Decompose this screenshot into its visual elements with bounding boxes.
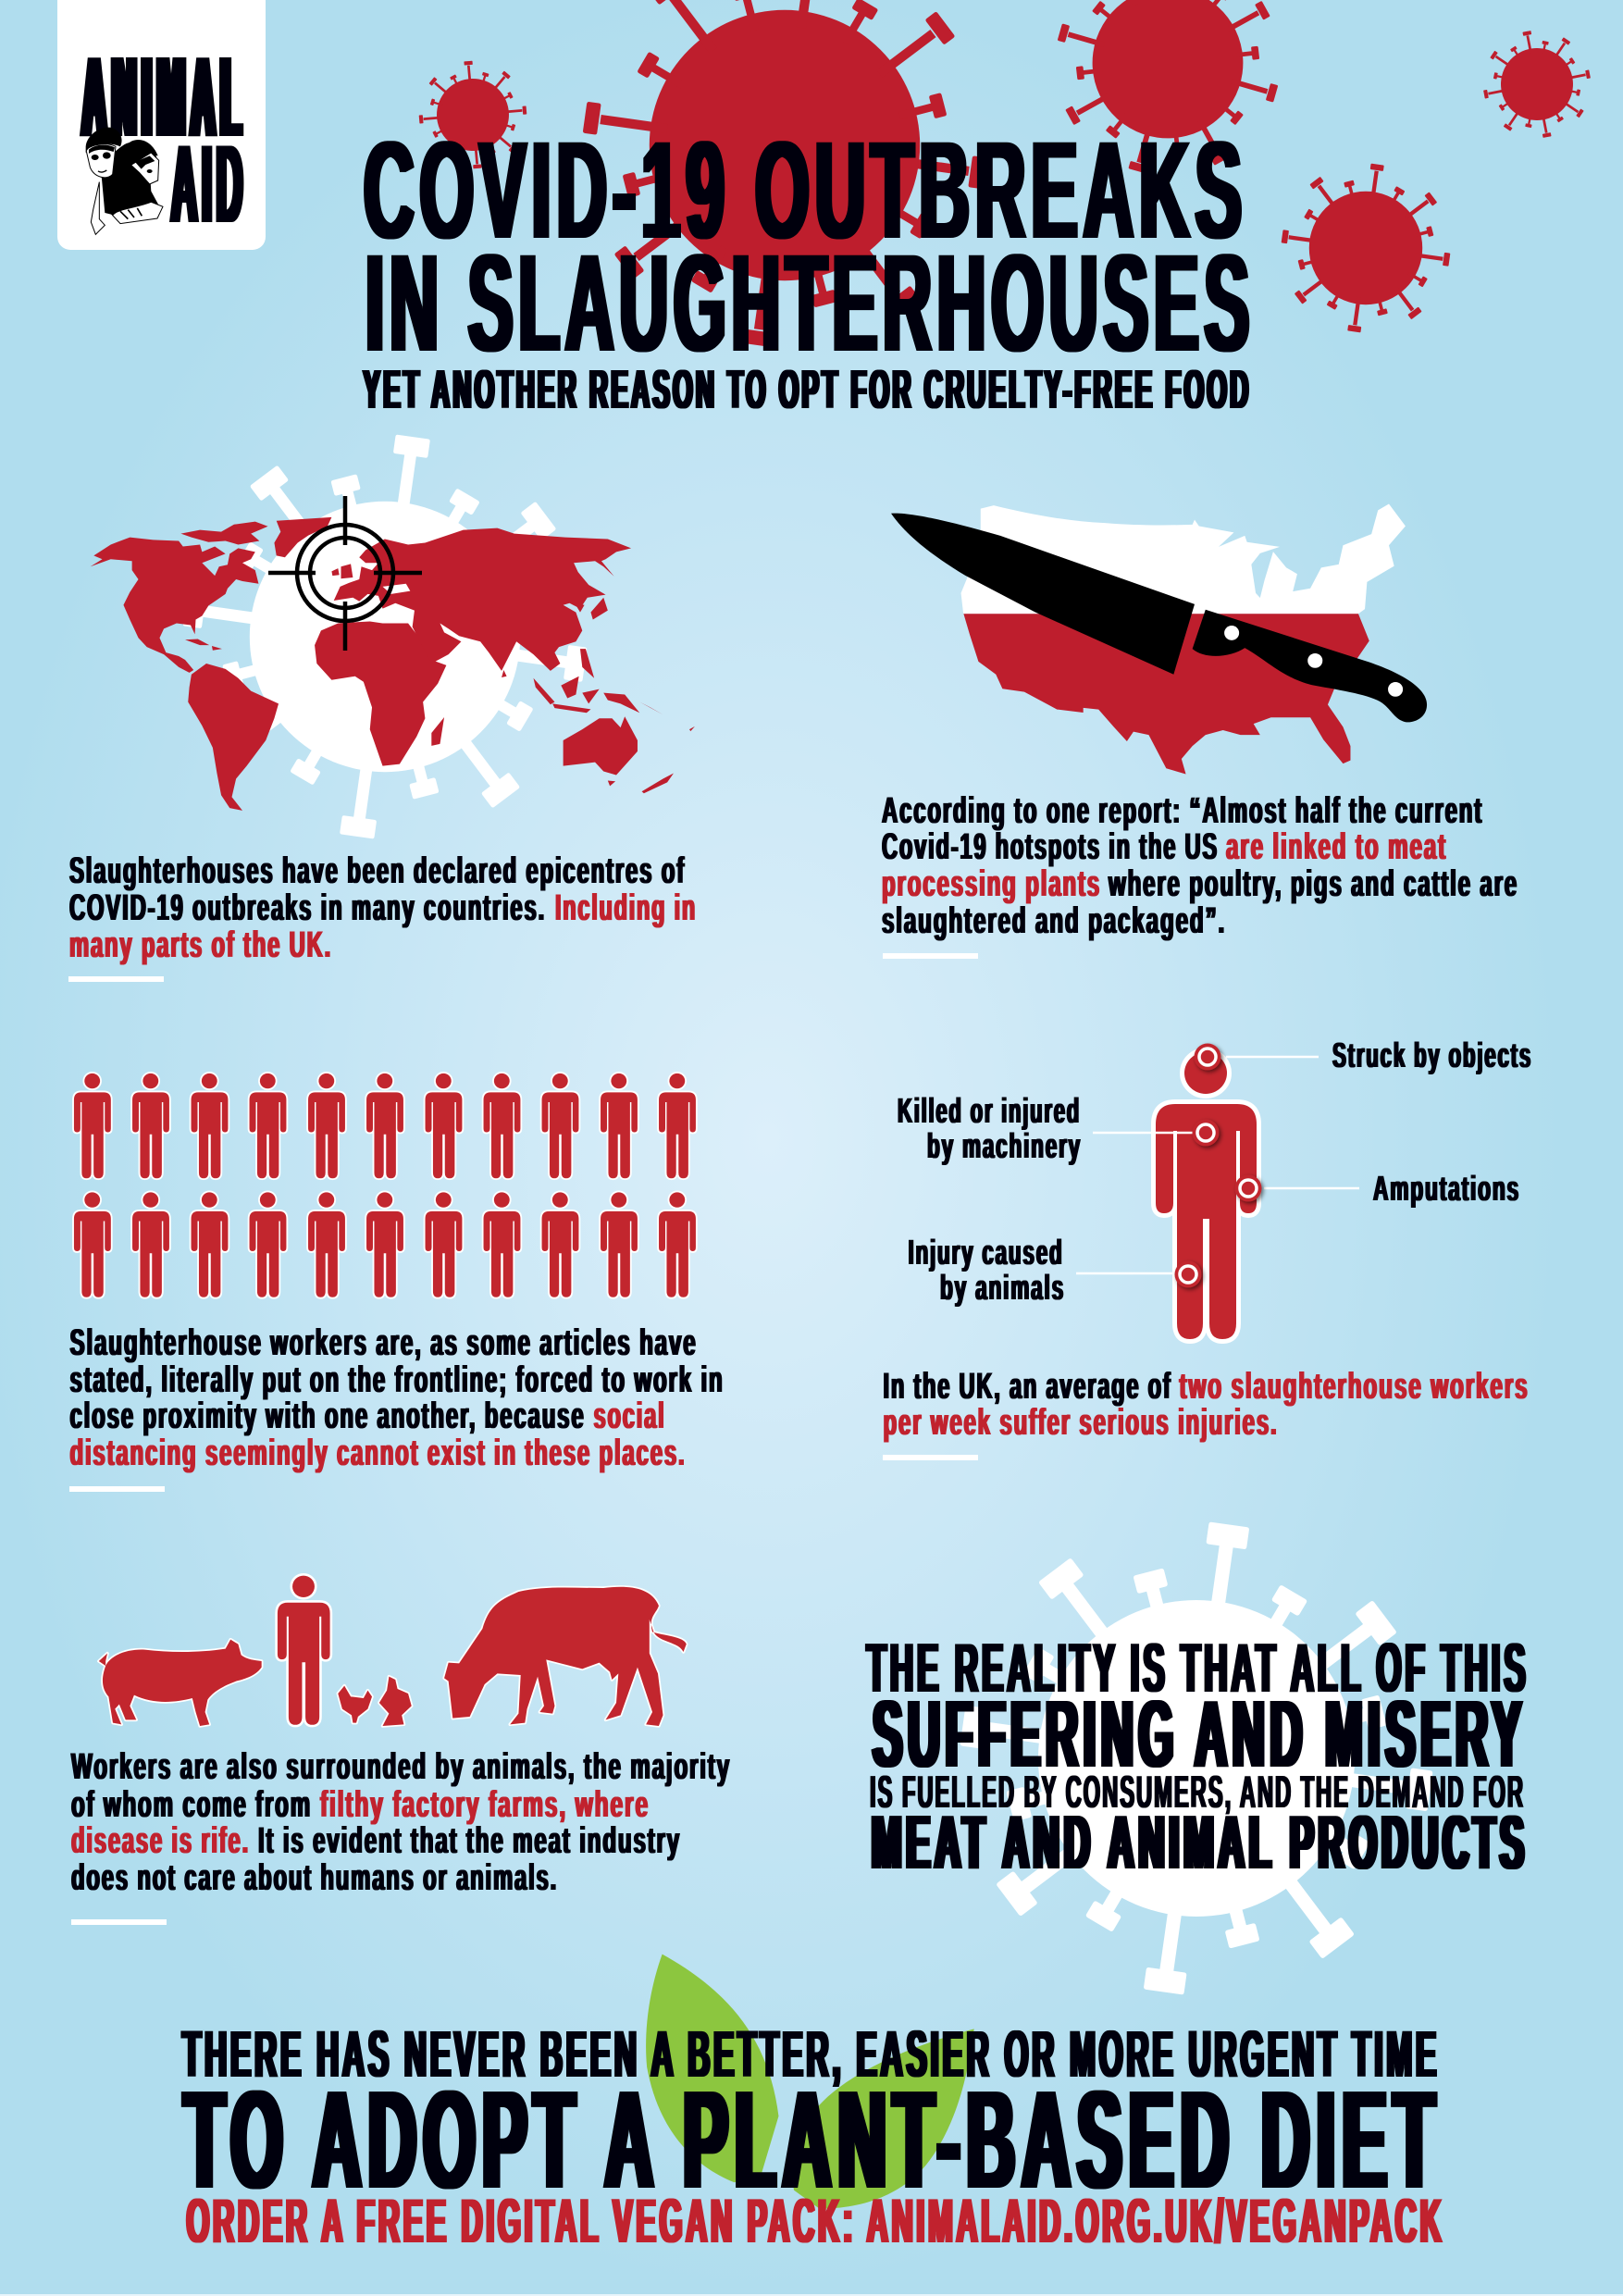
text block: frontline: stated, literally put on the frontline; forced to work in <box>70 1359 724 1400</box>
pictogram: rows of workers <box>74 1074 696 1297</box>
icon: injured worker figure <box>1156 1052 1257 1339</box>
panel: world outbreaks <box>68 434 697 982</box>
icons: pig, chickens and cow <box>99 1587 687 1726</box>
text block: injuries per week: per week suffer serious injuries. <box>883 1402 1279 1443</box>
text block: factory farms: Workers are also surrounded by animals, the majority <box>71 1746 731 1787</box>
icon: man <box>278 1576 330 1725</box>
callout labels <box>898 1036 1532 1308</box>
decorative red virus illustrations <box>408 0 1605 347</box>
text block: factory farms: of whom come from <box>71 1784 312 1825</box>
text block: frontline <box>70 1322 724 1473</box>
text block: injuries per week: In the UK, an average of <box>883 1366 1171 1407</box>
text block: frontline: Slaughterhouse workers are, as some articles have <box>70 1322 698 1363</box>
callout labels: Injury caused <box>909 1234 1064 1272</box>
text block: US report: processing plants <box>882 863 1101 904</box>
callout labels: Killed or injured <box>898 1092 1081 1131</box>
callout labels: Amputations <box>1373 1170 1520 1209</box>
icon: green leaves <box>646 1955 974 2209</box>
world map <box>91 517 695 811</box>
text block: factory farms: filthy factory farms, where <box>320 1784 650 1825</box>
text block: frontline: social <box>594 1396 666 1436</box>
icon: monkeys <box>86 128 163 234</box>
text: ANIMAL <box>82 34 247 161</box>
title <box>364 112 1255 380</box>
panel: animals <box>71 1576 731 1925</box>
text block: frontline: close proximity with one another, because <box>70 1396 585 1436</box>
text block: epicentres: Slaughterhouses have been declared epicentres of <box>69 850 686 891</box>
icon: white virus <box>960 1521 1433 1995</box>
icon: medium virus right <box>1282 164 1450 332</box>
icon: small virus top right <box>1468 16 1605 153</box>
US map <box>961 503 1406 774</box>
text block: injuries per week <box>883 1366 1529 1443</box>
text block: frontline: distancing seemingly cannot exist in these places. <box>70 1433 687 1473</box>
callout lines <box>1076 1057 1359 1273</box>
text block: factory farms: It is evident that the meat industry <box>258 1820 681 1861</box>
text block: factory farms <box>71 1746 731 1898</box>
icon: white virus behind map <box>182 434 588 839</box>
text block: epicentres <box>69 850 697 965</box>
callout labels: by animals <box>940 1269 1065 1308</box>
injury markers <box>1175 1044 1262 1288</box>
text block: US report <box>882 790 1518 941</box>
panel: the reality statement <box>866 1521 1529 1995</box>
text block: US report: Covid-19 hotspots in the US <box>882 826 1219 867</box>
panel: US hotspots <box>882 503 1518 959</box>
logo: Animal Aid <box>57 0 266 250</box>
icon: top centre virus <box>1041 0 1295 190</box>
call to action <box>182 2018 1445 2256</box>
panel: injuries <box>883 1036 1532 1460</box>
text block: factory farms: disease is rife. <box>71 1820 250 1861</box>
text: AID <box>171 122 247 246</box>
text block: factory farms: does not care about humans or animals. <box>71 1857 558 1898</box>
icon: large virus <box>583 0 986 347</box>
icon: small virus left <box>408 50 538 180</box>
icon: knife <box>891 514 1427 722</box>
text block: epicentres: Including in <box>555 887 697 928</box>
icon: target crosshair <box>268 496 422 651</box>
text block: epicentres: many parts of the UK. <box>69 925 332 965</box>
text block: US report: slaughtered and packaged”. <box>882 900 1226 941</box>
callout labels: by machinery <box>927 1127 1082 1166</box>
panel: social distancing <box>69 1074 724 1492</box>
text block: US report: are linked to meat <box>1226 826 1447 867</box>
text block: epicentres: COVID-19 outbreaks in many countries. <box>69 887 546 928</box>
